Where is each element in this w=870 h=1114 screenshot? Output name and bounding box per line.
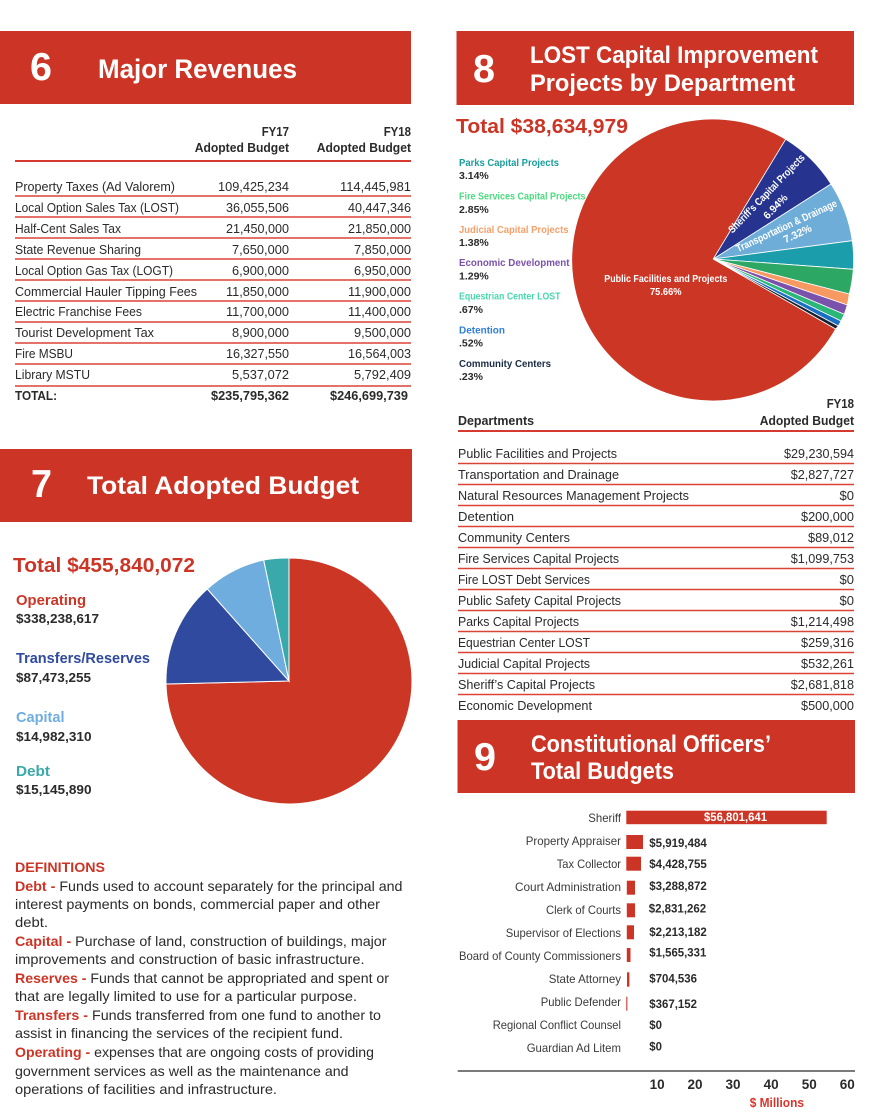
table rows: $2,827,727 — [791, 467, 854, 482]
text block: definitions: Reserves - Funds that cannot be appropriated and spent or — [15, 970, 389, 986]
legend: LOST departments: 3.14% — [459, 170, 489, 182]
table rows: Public Safety Capital Projects — [458, 593, 621, 608]
column headers: Adopted Budget — [317, 140, 412, 155]
text block: definitions: DEFINITIONS — [15, 859, 105, 875]
bar labels: Regional Conflict Counsel — [493, 1018, 621, 1032]
table rows: 21,450,000 — [226, 221, 289, 236]
table rows: $0 — [840, 593, 854, 608]
bar labels: Supervisor of Elections — [506, 926, 621, 940]
heading: section 6 banner — [0, 31, 411, 104]
x axis: 60 — [840, 1077, 855, 1092]
heading: section 7 banner — [0, 449, 412, 522]
legend: budget categories: Operating — [16, 592, 86, 609]
table rows — [458, 446, 854, 713]
table rows: 5,537,072 — [232, 367, 289, 382]
table: LOST departments — [458, 396, 855, 713]
legend: LOST departments: 1.38% — [459, 237, 489, 249]
table rows: $0 — [840, 488, 854, 503]
panel: section 7 total adopted budget — [0, 449, 412, 804]
x axis: 20 — [687, 1077, 703, 1092]
table rows: State Revenue Sharing — [15, 242, 141, 257]
bar labels — [459, 811, 622, 1055]
text block: definitions: Transfers - Funds transferred from one fund to another to — [15, 1007, 381, 1023]
legend: budget categories: $15,145,890 — [16, 782, 92, 797]
pie chart: LOST departments: Transportation & Drainage — [734, 198, 839, 255]
table rows: 6,950,000 — [354, 263, 411, 278]
table rows: Equestrian Center LOST — [458, 635, 590, 650]
legend: LOST departments: Fire Services Capital Projects — [459, 190, 586, 202]
table rows: Detention — [458, 509, 514, 524]
total budget figure: Total $455,840,072 — [13, 554, 195, 577]
legend: LOST departments: .23% — [459, 371, 484, 383]
pie chart: LOST departments — [572, 119, 854, 401]
legend: LOST departments: Community Centers — [459, 358, 551, 370]
table rows: Fire LOST Debt Services — [458, 572, 590, 587]
table rows: 21,850,000 — [348, 221, 411, 236]
pie chart: LOST departments: 6.94% — [761, 192, 791, 222]
bar labels: Tax Collector — [557, 857, 621, 871]
table rows: $89,012 — [808, 530, 854, 545]
panel: section 6 major revenues — [0, 31, 412, 403]
heading: section 6 banner: Major Revenues — [98, 54, 297, 84]
legend: budget categories: Capital — [16, 709, 64, 726]
table rows: 9,500,000 — [354, 325, 411, 340]
pie chart: LOST departments: Sheriff’s Capital Projects — [726, 152, 808, 236]
column headers: FY18 — [827, 396, 854, 411]
table rows: 11,400,000 — [348, 304, 411, 319]
table rows: Local Option Gas Tax (LOGT) — [15, 263, 173, 278]
legend: LOST departments — [459, 157, 586, 383]
table rows: $532,261 — [801, 656, 854, 671]
heading: section 8 banner: 8 — [473, 48, 495, 91]
text block: definitions — [15, 859, 403, 1097]
column headers: Departments — [458, 413, 534, 428]
table rows: Library MSTU — [15, 367, 90, 382]
panel: section 8 LOST capital improvement projects — [456, 31, 855, 713]
table rows: $259,316 — [801, 635, 854, 650]
bar values: $0 — [649, 1042, 662, 1054]
table rows: TOTAL: — [15, 388, 57, 403]
column headers: FY18 — [384, 124, 411, 139]
bars — [626, 811, 827, 1011]
column headers: Adopted Budget — [760, 413, 855, 428]
x axis: 40 — [764, 1077, 779, 1092]
heading: section 6 banner: 6 — [30, 46, 52, 89]
table rows: 40,447,346 — [348, 200, 411, 215]
bar values: $2,831,262 — [649, 903, 706, 915]
table rows: $235,795,362 — [211, 388, 289, 403]
table rows: Economic Development — [458, 698, 592, 713]
table rows: Fire MSBU — [15, 346, 73, 361]
legend: budget categories — [16, 592, 150, 797]
table rows: $200,000 — [801, 509, 854, 524]
text block: definitions: that are legally limited to use for a particular purpose. — [15, 988, 357, 1004]
table rows: $1,214,498 — [791, 614, 854, 629]
x axis: 10 — [650, 1077, 665, 1092]
bar values: $3,288,872 — [649, 881, 707, 893]
table rows: Fire Services Capital Projects — [458, 551, 619, 566]
bar values: $704,536 — [649, 974, 697, 986]
bar labels: Property Appraiser — [526, 834, 621, 848]
heading: section 9 banner: 9 — [474, 736, 496, 779]
bar values: $2,213,182 — [649, 927, 707, 939]
table rows: Commercial Hauler Tipping Fees — [15, 284, 197, 299]
table rows: Parks Capital Projects — [458, 614, 579, 629]
table rows: Transportation and Drainage — [458, 467, 619, 482]
pie chart: budget categories — [166, 558, 412, 804]
legend: LOST departments: 1.29% — [459, 270, 489, 282]
table rows: Half-Cent Sales Tax — [15, 221, 121, 236]
heading: section 8 banner: LOST Capital Improvement — [530, 42, 818, 69]
table rows: Natural Resources Management Projects — [458, 488, 689, 503]
legend: budget categories: $87,473,255 — [16, 670, 91, 685]
table rows: 114,445,981 — [340, 179, 411, 194]
text block: definitions: Capital - Purchase of land, construction of buildings, major — [15, 933, 387, 949]
table rows: Tourist Development Tax — [15, 325, 154, 340]
panel: section 9 constitutional officers — [458, 720, 855, 1110]
text block: definitions: operations of facilities and infrastructure. — [15, 1081, 277, 1097]
table rows: Community Centers — [458, 530, 570, 545]
heading: section 9 banner: Constitutional Officers’ — [531, 731, 771, 758]
bar values: $367,152 — [649, 999, 697, 1011]
text block: definitions: debt. — [15, 914, 48, 930]
text block: definitions: improvements and construction of basic infrastructure. — [15, 951, 364, 967]
bar values: $0 — [649, 1020, 662, 1032]
heading: section 9 banner: Total Budgets — [531, 758, 674, 785]
heading: section 8 banner — [456, 31, 854, 105]
column headers — [458, 396, 855, 431]
table rows: 11,900,000 — [348, 284, 411, 299]
bar labels: State Attorney — [549, 972, 621, 986]
table rows: 7,650,000 — [232, 242, 289, 257]
bar labels: Court Administration — [515, 880, 621, 894]
table rows: 6,900,000 — [232, 263, 289, 278]
column headers — [15, 124, 412, 161]
column headers: Adopted Budget — [195, 140, 290, 155]
column headers: FY17 — [262, 124, 289, 139]
heading: section 7 banner: Total Adopted Budget — [87, 472, 360, 500]
legend: LOST departments: Judicial Capital Projects — [459, 224, 569, 236]
heading: section 8 banner: Projects by Department — [530, 70, 795, 97]
table rows: Electric Franchise Fees — [15, 304, 142, 319]
legend: LOST departments: .52% — [459, 338, 484, 350]
bar values — [649, 812, 768, 1054]
total LOST figure: Total $38,634,979 — [456, 115, 628, 138]
table rows: 109,425,234 — [218, 179, 289, 194]
x axis: 30 — [725, 1077, 741, 1092]
text block: definitions: assist in financing the services of the recipient fund. — [15, 1025, 343, 1041]
legend: budget categories: $14,982,310 — [16, 729, 92, 744]
heading: section 9 banner — [458, 720, 855, 793]
x axis: 50 — [802, 1077, 817, 1092]
table rows: Property Taxes (Ad Valorem) — [15, 179, 175, 194]
table rows: $246,699,739 — [330, 388, 408, 403]
legend: LOST departments: Equestrian Center LOST — [459, 290, 561, 302]
table rows: 36,055,506 — [226, 200, 289, 215]
table rows: 11,850,000 — [226, 284, 289, 299]
bar values: $4,428,755 — [649, 859, 707, 871]
bar values: $5,919,484 — [649, 838, 707, 850]
table rows: Sheriff’s Capital Projects — [458, 677, 595, 692]
legend: LOST departments: Economic Development — [459, 257, 570, 269]
table rows: Judicial Capital Projects — [458, 656, 590, 671]
pie chart: LOST departments: Public Facilities and Projects — [604, 273, 727, 285]
text block: definitions: Operating - expenses that are ongoing costs of providing — [15, 1044, 374, 1060]
legend: LOST departments: 2.85% — [459, 204, 489, 216]
table rows: 8,900,000 — [232, 325, 289, 340]
legend: budget categories: Transfers/Reserves — [16, 650, 150, 667]
table rows: 16,564,003 — [348, 346, 411, 361]
x axis — [458, 1071, 855, 1110]
table rows: 7,850,000 — [354, 242, 411, 257]
bar labels: Guardian Ad Litem — [527, 1041, 621, 1055]
table rows: Public Facilities and Projects — [458, 446, 617, 461]
table rows: 11,700,000 — [226, 304, 289, 319]
heading: section 7 banner: 7 — [31, 463, 52, 506]
legend: LOST departments: Parks Capital Projects — [459, 157, 559, 169]
table rows: $0 — [840, 572, 854, 587]
pie chart: LOST departments: 7.32% — [782, 222, 814, 246]
table rows — [15, 179, 411, 403]
table rows: $500,000 — [801, 698, 854, 713]
bar labels: Clerk of Courts — [546, 903, 621, 917]
bar values: $56,801,641 — [704, 812, 768, 824]
text block: definitions: government services as well as the maintenance and — [15, 1063, 348, 1079]
bar values: $1,565,331 — [649, 948, 707, 960]
text block: definitions: Debt - Funds used to account separately for the principal and — [15, 878, 403, 894]
bar chart: officer budgets — [458, 811, 855, 1110]
table rows: $29,230,594 — [784, 446, 854, 461]
table rows: Local Option Sales Tax (LOST) — [15, 200, 179, 215]
legend: LOST departments: .67% — [459, 304, 484, 316]
table rows: $1,099,753 — [791, 551, 854, 566]
legend: budget categories: $338,238,617 — [16, 611, 99, 626]
bar labels: Public Defender — [541, 995, 621, 1009]
x axis: $ Millions — [750, 1095, 804, 1110]
legend: LOST departments: Detention — [459, 324, 505, 336]
bar labels: Sheriff — [588, 811, 622, 825]
bar labels: Board of County Commissioners — [459, 949, 621, 963]
table rows: 16,327,550 — [226, 346, 289, 361]
table: major revenues — [15, 124, 412, 403]
table rows: $2,681,818 — [791, 677, 854, 692]
pie chart: LOST departments: 75.66% — [650, 286, 682, 298]
legend: budget categories: Debt — [16, 763, 50, 780]
table rows: 5,792,409 — [354, 367, 411, 382]
text block: definitions: interest payments on bonds, commercial paper and other — [15, 896, 380, 912]
